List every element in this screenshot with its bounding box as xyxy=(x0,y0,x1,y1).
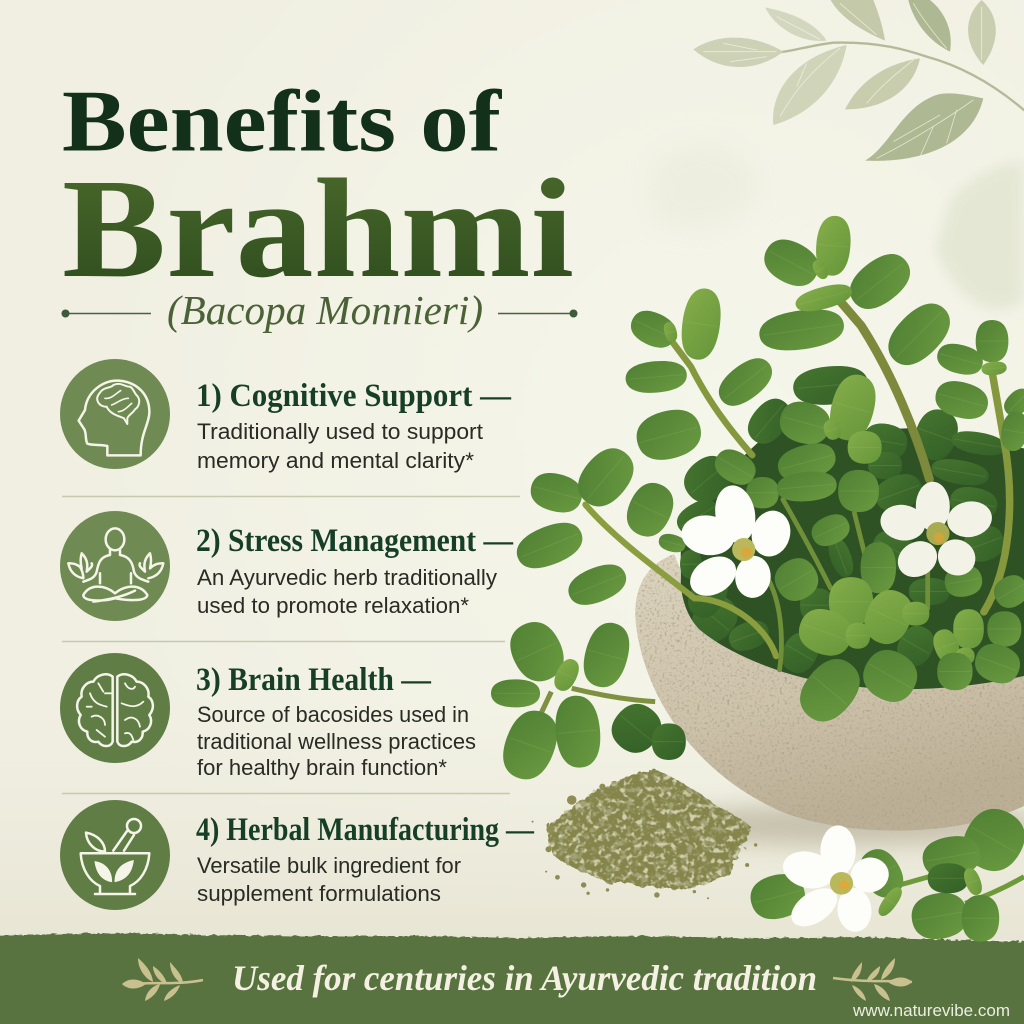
benefit 2 xyxy=(60,511,513,621)
benefit 4 xyxy=(60,800,534,910)
title: Brahmi xyxy=(62,149,574,307)
description: for healthy brain function* xyxy=(197,755,447,780)
icon: meditation xyxy=(60,511,170,621)
powder pile xyxy=(532,771,757,899)
icon: brain xyxy=(60,653,170,763)
heading: 3) Brain Health — xyxy=(196,662,431,698)
description xyxy=(197,853,461,906)
flowers on plant xyxy=(679,482,995,604)
sprig left of bowl xyxy=(491,614,686,786)
description xyxy=(197,565,497,618)
description: memory and mental clarity* xyxy=(197,448,474,473)
icon: mortar and pestle xyxy=(60,800,170,910)
icon: left sprig xyxy=(122,958,203,1001)
title xyxy=(62,74,574,307)
banner xyxy=(0,933,1024,1024)
plant: dark foliage mass xyxy=(672,363,1024,694)
bowl xyxy=(630,550,1024,840)
description: used to promote relaxation* xyxy=(197,593,469,618)
description: Versatile bulk ingredient for xyxy=(197,853,461,878)
bowl shadow xyxy=(650,805,1024,845)
description xyxy=(197,419,483,473)
subtitle xyxy=(62,287,578,333)
description: Traditionally used to support xyxy=(197,419,483,444)
description: An Ayurvedic herb traditionally xyxy=(197,565,497,590)
benefit 1 xyxy=(60,359,511,473)
website: www.naturevibe.com xyxy=(852,1001,1010,1020)
description: traditional wellness practices xyxy=(197,729,476,754)
description xyxy=(197,702,476,780)
banner text: Used for centuries in Ayurvedic tradition xyxy=(232,958,817,998)
heading: 1) Cognitive Support — xyxy=(196,378,511,414)
decorative branch top right xyxy=(693,0,1024,161)
heading: 2) Stress Management — xyxy=(196,523,513,559)
heading: 4) Herbal Manufacturing — xyxy=(196,812,534,848)
sprig and flower bottom right xyxy=(746,799,1024,943)
title: Benefits of xyxy=(62,74,503,170)
description: supplement formulations xyxy=(197,881,441,906)
benefit 3 xyxy=(60,653,476,780)
plant: stems and leaves xyxy=(511,214,1024,732)
subtitle: (Bacopa Monnieri) xyxy=(167,287,483,333)
icon: head with brain xyxy=(60,359,170,469)
description: Source of bacosides used in xyxy=(197,702,469,727)
icon: right sprig xyxy=(833,958,912,1001)
